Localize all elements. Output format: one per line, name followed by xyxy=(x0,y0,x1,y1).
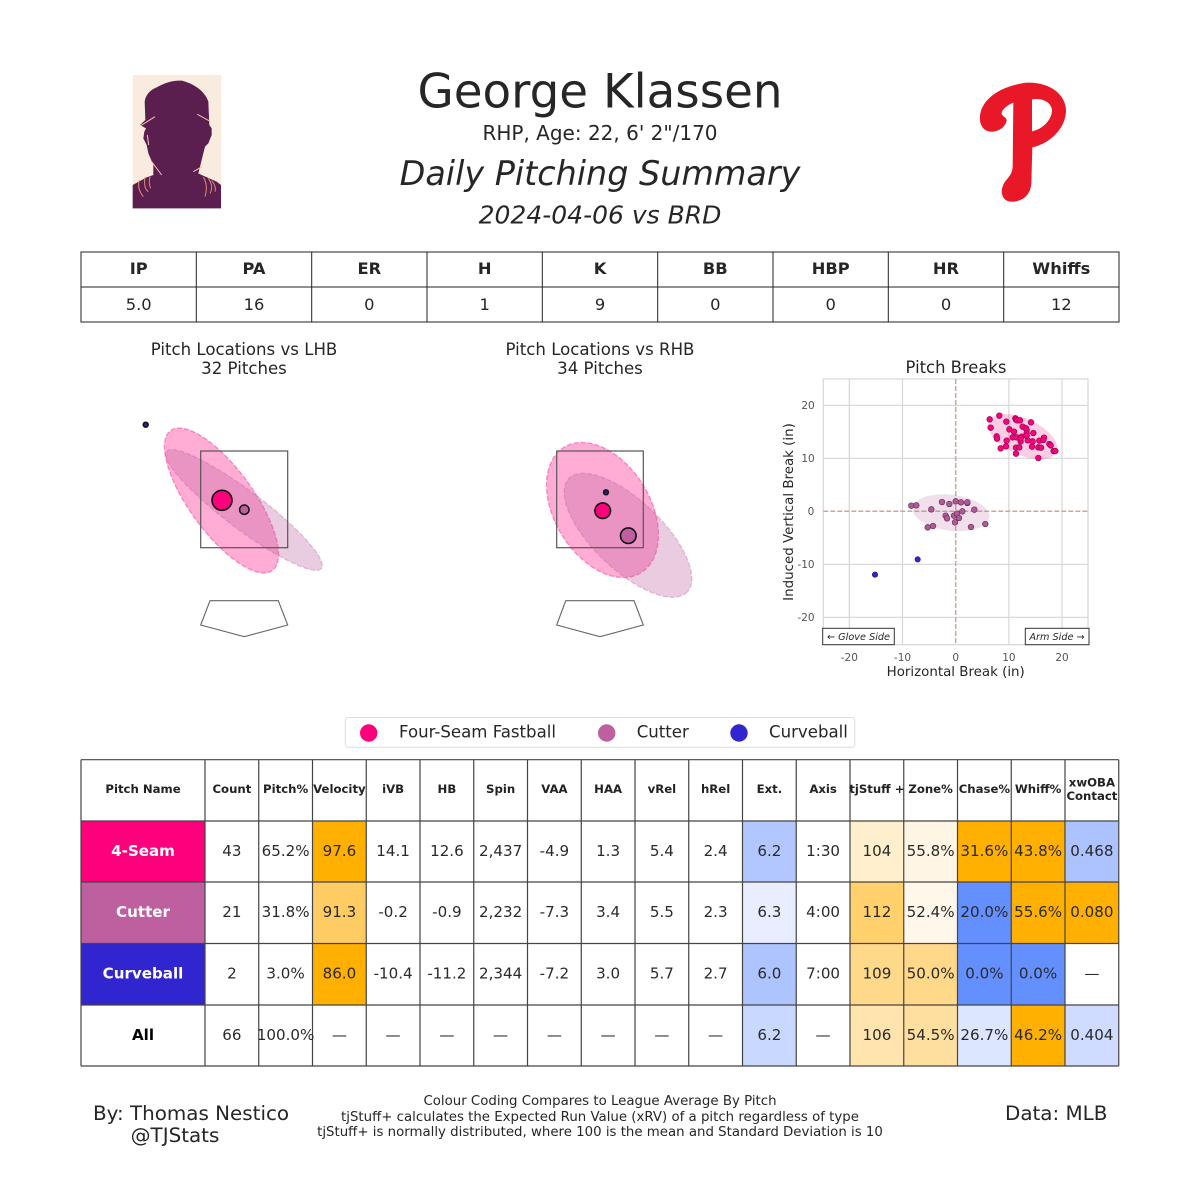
RHB cutter location ellipse xyxy=(545,454,711,617)
stat table header row: BB xyxy=(703,259,728,278)
row: Cutter xyxy=(116,903,1114,921)
stat table values row: 12 xyxy=(1051,295,1072,314)
table header row: Zone% xyxy=(908,782,953,796)
RHB four-seam location ellipse xyxy=(523,422,682,598)
y axis tick labels: -20 xyxy=(797,612,815,624)
stat table values row: 0 xyxy=(710,295,720,314)
four-seam movement ellipse xyxy=(981,405,1064,469)
panel: pitch breaks scatter chart xyxy=(782,358,1089,680)
row: Curveball: 5.7 xyxy=(650,964,674,982)
row: 4-Seam: 2.4 xyxy=(704,842,728,860)
stat table values row: 0 xyxy=(826,295,836,314)
row: All: 106 xyxy=(862,1026,891,1044)
row: All: — xyxy=(547,1026,562,1044)
row: Curveball: 2.7 xyxy=(704,964,728,982)
LHB strike zone xyxy=(201,451,288,548)
stat table values row: 0 xyxy=(364,295,374,314)
zero reference lines xyxy=(823,379,1088,645)
y axis tick labels: -10 xyxy=(797,559,815,571)
stat table header row: PA xyxy=(242,259,266,278)
RHB cutter mean marker xyxy=(620,528,636,544)
row: Curveball: 2 xyxy=(227,964,237,982)
table header row: tjStuff + xyxy=(849,782,905,796)
heading: daily pitching summary: Daily Pitching Summary xyxy=(400,154,802,193)
table header row: Count xyxy=(212,782,252,796)
row: All: 66 xyxy=(222,1026,242,1044)
row: Curveball: 3.0% xyxy=(266,964,305,982)
stat table header row: K xyxy=(594,259,608,278)
stat table values row: 1 xyxy=(480,295,490,314)
stat table header row xyxy=(130,259,1090,278)
y axis tick labels: 0 xyxy=(808,506,814,518)
row: All: — xyxy=(493,1026,508,1044)
arm side annotation xyxy=(1025,628,1089,645)
row: Cutter: -0.9 xyxy=(432,903,462,921)
table header row: Whiff% xyxy=(1015,782,1062,796)
pitch breaks heading: Pitch Breaks xyxy=(906,358,1006,377)
row: All: — xyxy=(386,1026,401,1044)
stat table header row: ER xyxy=(357,259,382,278)
row: 4-Seam: 104 xyxy=(862,842,891,860)
stat table header row: H xyxy=(478,259,492,278)
x axis tick labels: -10 xyxy=(894,652,911,664)
table header row: Axis xyxy=(809,782,837,796)
legend: cutter xyxy=(598,722,689,742)
row: 4-Seam: 5.4 xyxy=(650,842,674,860)
RHB chart heading: 34 Pitches xyxy=(557,359,643,378)
table header row: Ext. xyxy=(757,782,782,796)
cutter break points xyxy=(908,498,988,530)
row: All: 6.2 xyxy=(757,1026,781,1044)
row: Cutter: -7.3 xyxy=(540,903,569,921)
row: Cutter: 5.5 xyxy=(650,903,674,921)
table header row xyxy=(105,776,1118,803)
row: 4-Seam: 1.3 xyxy=(596,842,620,860)
table header row: HB xyxy=(438,782,456,796)
stat table values row: 16 xyxy=(244,295,264,314)
row: Curveball: -11.2 xyxy=(427,964,466,982)
row: All: — xyxy=(332,1026,347,1044)
LHB chart heading: Pitch Locations vs LHB xyxy=(151,340,337,359)
row: 4-Seam: 1:30 xyxy=(806,842,840,860)
row: 4-Seam: 6.2 xyxy=(757,842,781,860)
footer: methodology notes: tjStuff+ calculates the Expected Run Value (xRV) of a pitch regardless of type xyxy=(341,1110,859,1125)
row: 4-Seam: 97.6 xyxy=(323,842,356,860)
RHB four-seam mean marker xyxy=(595,503,610,518)
legend: curveball xyxy=(730,722,848,742)
row: 4-Seam xyxy=(111,842,1114,860)
stat table values row xyxy=(126,295,1072,314)
row: All: — xyxy=(654,1026,669,1044)
row: 4-Seam: 4-Seam xyxy=(111,842,175,860)
RHB chart heading: Pitch Locations vs RHB xyxy=(506,340,694,359)
table header row: vRel xyxy=(648,782,676,796)
row: Cutter: 91.3 xyxy=(323,903,356,921)
row: 4-Seam: 43 xyxy=(222,842,242,860)
stat table header row: HR xyxy=(933,259,960,278)
pitch type legend xyxy=(345,718,855,747)
row: Cutter: 112 xyxy=(862,903,891,921)
row: Cutter: 6.3 xyxy=(757,903,781,921)
table header row: Velocity xyxy=(313,782,366,796)
row: Cutter: -0.2 xyxy=(378,903,408,921)
row: 4-Seam: 65.2% xyxy=(262,842,310,860)
row: All: 26.7% xyxy=(960,1026,1008,1044)
x axis tick labels: 0 xyxy=(952,652,959,664)
x axis tick labels xyxy=(841,652,1069,664)
table header row: Pitch% xyxy=(263,782,308,796)
table header row: iVB xyxy=(382,782,404,796)
row: Cutter: 52.4% xyxy=(907,903,955,921)
row: Curveball: 3.0 xyxy=(596,964,620,982)
stat table values row: 0 xyxy=(941,295,951,314)
row: 4-Seam: 2,437 xyxy=(479,842,522,860)
row: All: — xyxy=(601,1026,616,1044)
cutter movement ellipse xyxy=(910,490,992,535)
footer: methodology notes: Colour Coding Compares to League Average By Pitch xyxy=(423,1094,777,1109)
x axis tick labels: -20 xyxy=(841,652,858,664)
table header row: Pitch Name xyxy=(105,782,181,796)
row: Cutter: 3.4 xyxy=(596,903,620,921)
glove side annotation xyxy=(823,628,894,645)
LHB curveball mean marker xyxy=(143,422,148,427)
row: Cutter: Cutter xyxy=(116,903,171,921)
panel: pitch locations vs LHB xyxy=(143,340,337,637)
stat table header row: IP xyxy=(130,259,148,278)
row: Cutter: 0.080 xyxy=(1070,903,1114,921)
row: All: — xyxy=(708,1026,723,1044)
stat table values row: 5.0 xyxy=(126,295,152,314)
LHB chart heading xyxy=(151,340,337,378)
table header row: Contact xyxy=(1066,789,1118,803)
LHB chart heading: 32 Pitches xyxy=(201,359,287,378)
RHB home plate xyxy=(557,601,643,637)
panel: pitch locations vs RHB xyxy=(506,340,711,637)
row: Curveball: Curveball xyxy=(103,964,183,982)
row: Cutter: 4:00 xyxy=(806,903,840,921)
row: Curveball xyxy=(103,964,1099,982)
row: Cutter: 21 xyxy=(222,903,242,921)
four-seam break points xyxy=(987,413,1058,461)
RHB chart heading xyxy=(506,340,694,378)
legend: curveball: Curveball xyxy=(769,722,848,742)
subtitle: player bio: RHP, Age: 22, 6' 2"/170 xyxy=(482,121,718,145)
RHB curveball mean marker xyxy=(604,490,608,495)
row: Curveball: -10.4 xyxy=(374,964,413,982)
row: Curveball: 50.0% xyxy=(907,964,955,982)
icon: player headshot silhouette xyxy=(133,75,221,208)
glove side annotation: ← Glove Side xyxy=(827,632,890,643)
stat table header row: Whiffs xyxy=(1032,259,1090,278)
row: Curveball: -7.2 xyxy=(540,964,569,982)
table header row: hRel xyxy=(701,782,730,796)
row: Curveball: 86.0 xyxy=(323,964,356,982)
row: Curveball: 109 xyxy=(862,964,891,982)
table header row: Chase% xyxy=(959,782,1010,796)
icon: Phillies P logo xyxy=(980,83,1066,202)
row: 4-Seam: 31.6% xyxy=(960,842,1008,860)
footer: methodology notes xyxy=(317,1094,883,1140)
row: All xyxy=(132,1026,1114,1044)
row: All: All xyxy=(132,1026,154,1044)
footer: author credit: By: Thomas Nestico xyxy=(93,1102,289,1125)
row: Cutter: 2.3 xyxy=(704,903,728,921)
row: Cutter: 2,232 xyxy=(479,903,522,921)
legend: four-seam fastball: Four-Seam Fastball xyxy=(399,722,556,742)
LHB cutter location ellipse xyxy=(155,436,333,584)
row: Curveball: 0.0% xyxy=(1019,964,1057,982)
y axis tick labels xyxy=(797,400,815,624)
pitch breaks plot frame and grid xyxy=(823,379,1088,645)
legend: cutter: Cutter xyxy=(637,722,689,742)
table header row: Spin xyxy=(486,782,515,796)
curveball break points xyxy=(872,557,920,577)
stat table header row: HBP xyxy=(812,259,850,278)
row: Cutter: 31.8% xyxy=(262,903,310,921)
stat table values row: 9 xyxy=(595,295,605,314)
table header row: VAA xyxy=(541,782,568,796)
RHB strike zone xyxy=(557,451,643,548)
row: Curveball: 7:00 xyxy=(806,964,840,982)
table header row: xwOBA xyxy=(1069,776,1115,790)
LHB cutter mean marker xyxy=(240,505,249,514)
row: Curveball: — xyxy=(1084,964,1099,982)
x axis tick labels: 20 xyxy=(1055,652,1069,664)
y axis label: Induced Vertical Break (in) xyxy=(782,423,797,601)
title: George Klassen xyxy=(417,66,783,120)
row: Curveball: 2,344 xyxy=(479,964,522,982)
LHB four-seam mean marker xyxy=(212,490,232,510)
row: Cutter: 55.6% xyxy=(1014,903,1062,921)
footer: author credit xyxy=(93,1102,289,1147)
pitch metrics table xyxy=(81,760,1119,1066)
row: 4-Seam: -4.9 xyxy=(540,842,569,860)
LHB home plate xyxy=(201,601,288,637)
row: 4-Seam: 14.1 xyxy=(376,842,410,860)
LHB four-seam location ellipse xyxy=(145,412,298,589)
arm side annotation: Arm Side → xyxy=(1028,632,1085,643)
row: Curveball: 6.0 xyxy=(757,964,781,982)
row: Cutter: 20.0% xyxy=(960,903,1008,921)
x axis label: Horizontal Break (in) xyxy=(887,665,1025,680)
heading: game date and opponent: 2024-04-06 vs BRD xyxy=(479,200,721,230)
table cell colour fills xyxy=(81,821,1119,1066)
footer: author credit: @TJStats xyxy=(131,1124,219,1147)
row: All: 0.404 xyxy=(1070,1026,1114,1044)
row: 4-Seam: 12.6 xyxy=(430,842,464,860)
row: All: — xyxy=(816,1026,831,1044)
stat line table xyxy=(81,252,1119,322)
row: All: 54.5% xyxy=(907,1026,955,1044)
row: 4-Seam: 0.468 xyxy=(1070,842,1114,860)
x axis tick labels: 10 xyxy=(1002,652,1016,664)
table header row: HAA xyxy=(594,782,622,796)
row: All: 100.0% xyxy=(257,1026,314,1044)
row: 4-Seam: 55.8% xyxy=(907,842,955,860)
y axis tick labels: 20 xyxy=(801,400,815,412)
row: 4-Seam: 43.8% xyxy=(1014,842,1062,860)
footer: data source: Data: MLB xyxy=(1005,1102,1107,1125)
row: Curveball: 0.0% xyxy=(965,964,1004,982)
footer: methodology notes: tjStuff+ is normally distributed, where 100 is the mean and Standard Deviation is 10 xyxy=(317,1125,883,1140)
row: All: — xyxy=(439,1026,454,1044)
y axis tick labels: 10 xyxy=(801,453,815,465)
row: All: 46.2% xyxy=(1014,1026,1062,1044)
